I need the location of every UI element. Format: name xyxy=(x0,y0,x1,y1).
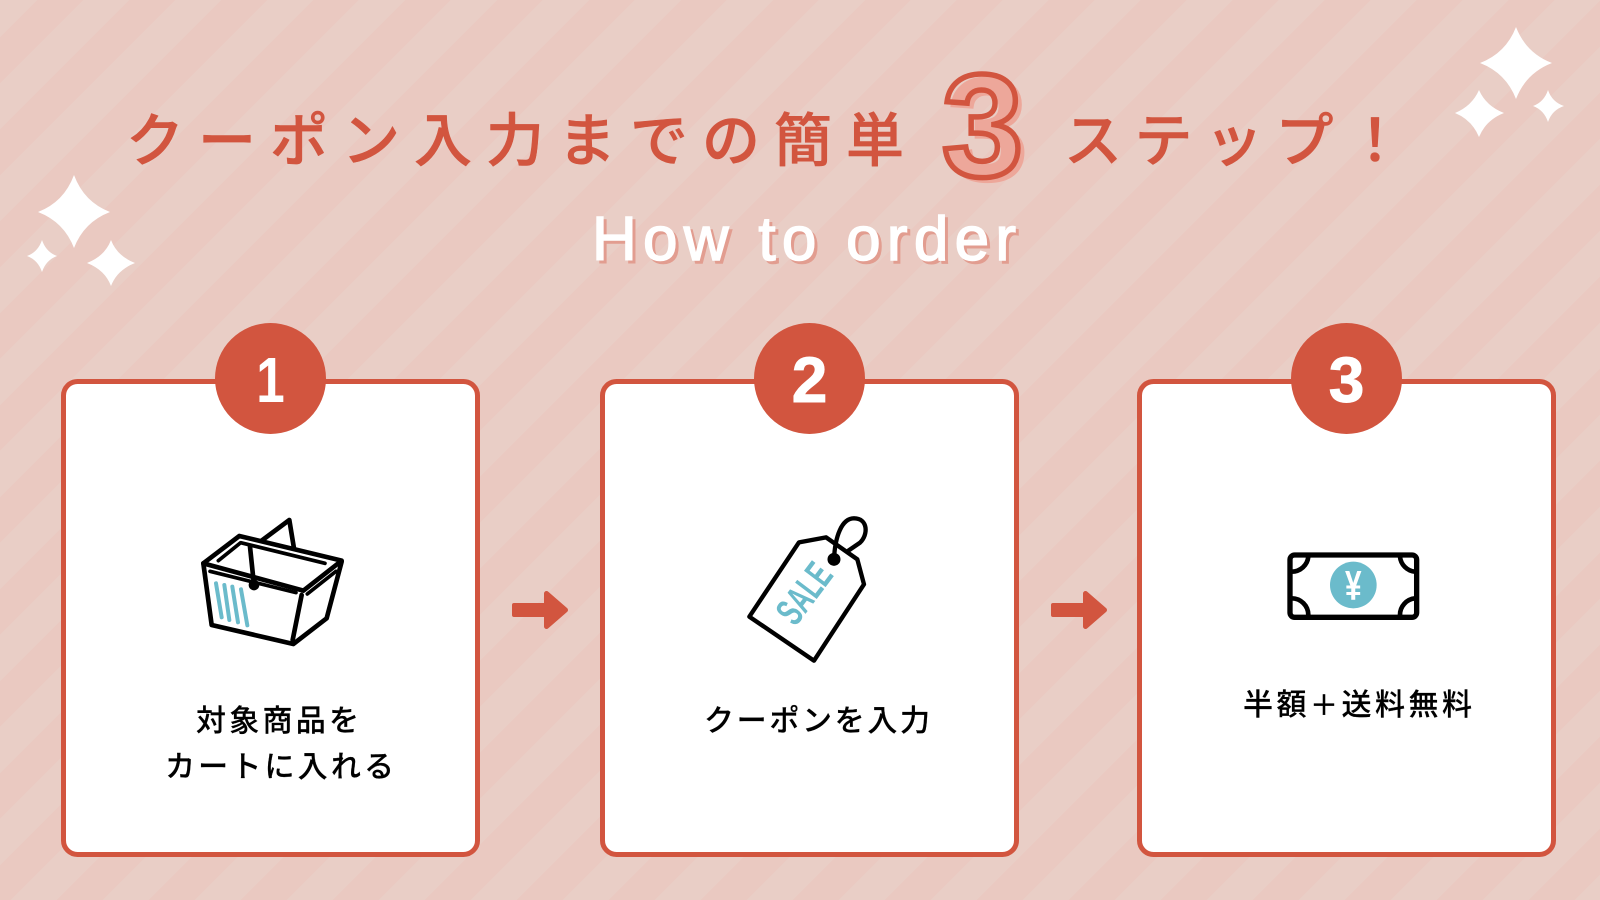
number badge 2: 2 xyxy=(792,344,827,416)
number badge 3 xyxy=(1291,323,1402,434)
title: big number 3: 3 xyxy=(942,44,1023,207)
title: Japanese heading part 1: クーポン入力までの簡単 xyxy=(126,109,904,174)
icon: sale tag xyxy=(749,518,866,661)
step 1 text xyxy=(165,705,394,784)
arrow 1 xyxy=(512,594,566,626)
icon: sale tag: SALE xyxy=(767,554,842,633)
panel: step 3 xyxy=(1140,323,1554,854)
title: Japanese heading part 2: ステップ！ xyxy=(1064,109,1404,174)
subtitle: How to order: How to order xyxy=(592,205,1016,274)
step 3 text: 半額＋送料無料 xyxy=(1243,689,1472,722)
title: big number 3: 3 xyxy=(947,48,1028,211)
card 1 xyxy=(64,382,478,854)
step 2 text: クーポンを入力 xyxy=(704,705,930,738)
sparkles: left group xyxy=(27,175,135,286)
icon: yen banknote xyxy=(1290,555,1417,617)
number badge 2 xyxy=(754,323,865,434)
card 2 xyxy=(602,382,1016,854)
step 1 text: 対象商品を xyxy=(196,705,359,738)
number badge 1: 1 xyxy=(256,346,285,416)
subtitle: How to order: How to order xyxy=(595,208,1019,277)
number badge 3: 3 xyxy=(1329,344,1364,416)
step 1 text: カートに入れる xyxy=(165,751,394,784)
card 3 xyxy=(1140,382,1554,854)
icon: shopping basket xyxy=(203,520,342,644)
panel: step 1 xyxy=(64,323,478,854)
panel: step 2 xyxy=(602,323,1016,854)
number badge 1 xyxy=(215,323,326,434)
sparkles: right group xyxy=(1455,27,1564,137)
icon: yen banknote: ¥ xyxy=(1345,562,1362,609)
arrow 2 xyxy=(1051,594,1104,626)
